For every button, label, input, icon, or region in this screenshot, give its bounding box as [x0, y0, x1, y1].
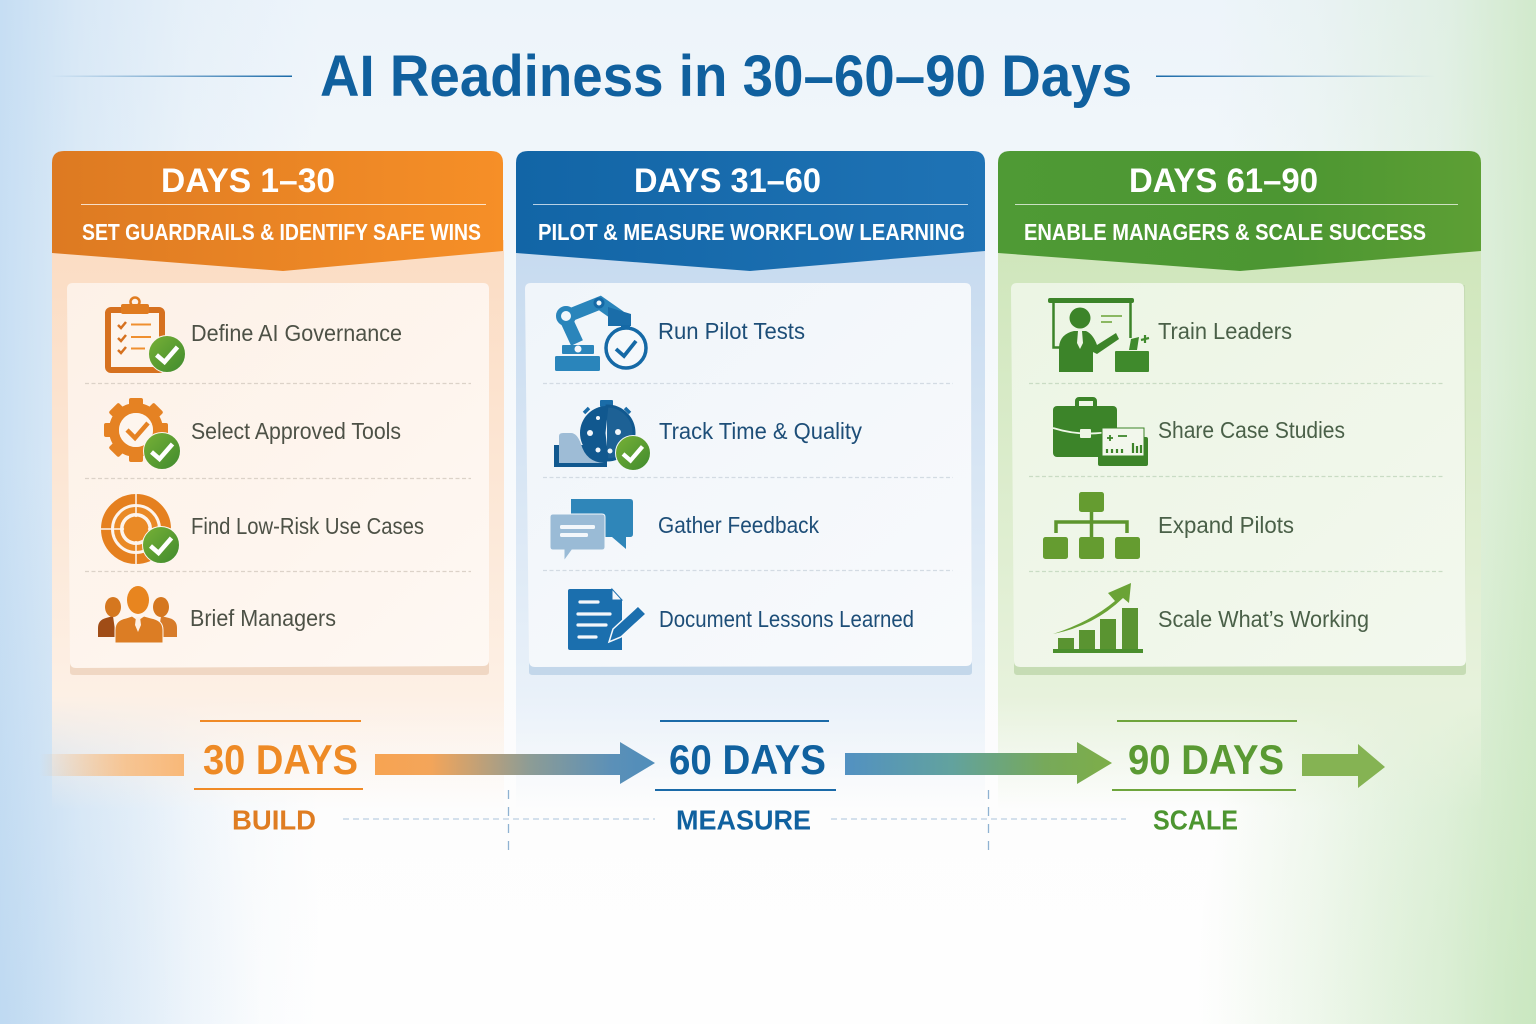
icon: org chart [1043, 492, 1140, 559]
icon: clipboard with check [108, 298, 186, 372]
icon: briefcase with report [1053, 399, 1148, 466]
panel: days 1-30 [52, 151, 504, 810]
icon: manager group [98, 586, 177, 643]
text: define ai governance: Define AI Governance [191, 320, 402, 346]
header: days 1-30 [52, 151, 503, 271]
text: select approved tools: Select Approved Tools [191, 418, 401, 444]
panel: days 31-60 [516, 151, 985, 810]
header: days 1-30: SET GUARDRAILS & IDENTIFY SAFE WINS [82, 219, 481, 245]
icon: presenter at board [1048, 298, 1149, 372]
icon: growth chart with arrow [1053, 583, 1143, 653]
milestone: 90 days scale: 90 DAYS [1128, 736, 1284, 783]
text: document lessons learned: Document Lessons Learned [659, 606, 914, 632]
icon: document with pencil [568, 589, 646, 650]
timeline [40, 720, 1385, 852]
header: days 61-90: ENABLE MANAGERS & SCALE SUCCESS [1024, 219, 1426, 245]
icon: stopwatch and folder [554, 400, 650, 470]
card: days 1-30 tasks [67, 283, 489, 675]
header: days 31-60: DAYS 31–60 [634, 162, 821, 200]
milestone: 90 days scale: SCALE [1153, 804, 1238, 836]
icon: chat bubbles [550, 499, 633, 561]
milestone: 30 days build: 30 DAYS [203, 736, 358, 783]
card: days 61-90 tasks [1011, 283, 1466, 675]
milestone: 30 days build [194, 720, 363, 836]
title: AI Readiness in 30–60–90 Days [320, 44, 1132, 109]
text: gather feedback: Gather Feedback [658, 512, 819, 538]
text: scale what's working: Scale What’s Working [1158, 606, 1369, 632]
text: track time and quality: Track Time & Quality [659, 418, 862, 444]
milestone: 60 days measure: MEASURE [676, 804, 811, 836]
header: days 1-30: DAYS 1–30 [161, 162, 335, 200]
arrow: build to measure [375, 742, 655, 784]
header: days 61-90 [998, 151, 1481, 271]
text: find low-risk use cases: Find Low-Risk Use Cases [191, 513, 424, 539]
icon: target with check [101, 493, 180, 564]
icon: robot arm with stopwatch [555, 299, 646, 371]
milestone: 60 days measure: 60 DAYS [669, 736, 826, 783]
card: days 31-60 tasks [525, 283, 972, 675]
icon: gear with check [104, 398, 180, 470]
text: share case studies: Share Case Studies [1158, 417, 1345, 443]
header: days 31-60 [516, 151, 985, 271]
header: days 31-60: PILOT & MEASURE WORKFLOW LEARNING [538, 219, 965, 245]
milestone: 60 days measure [655, 720, 836, 836]
milestone: 30 days build: BUILD [232, 804, 316, 836]
arrow: measure to scale [845, 742, 1112, 784]
header: days 61-90: DAYS 61–90 [1129, 162, 1318, 200]
panel: days 61-90 [998, 151, 1481, 810]
text: run pilot tests: Run Pilot Tests [658, 318, 805, 344]
text: train leaders: Train Leaders [1158, 318, 1292, 344]
text: brief managers: Brief Managers [190, 605, 336, 631]
arrow: scale onward [1302, 744, 1385, 788]
text: expand pilots: Expand Pilots [1158, 512, 1294, 538]
milestone: 90 days scale [1112, 720, 1297, 836]
arrow: lead-in bar [40, 754, 184, 776]
